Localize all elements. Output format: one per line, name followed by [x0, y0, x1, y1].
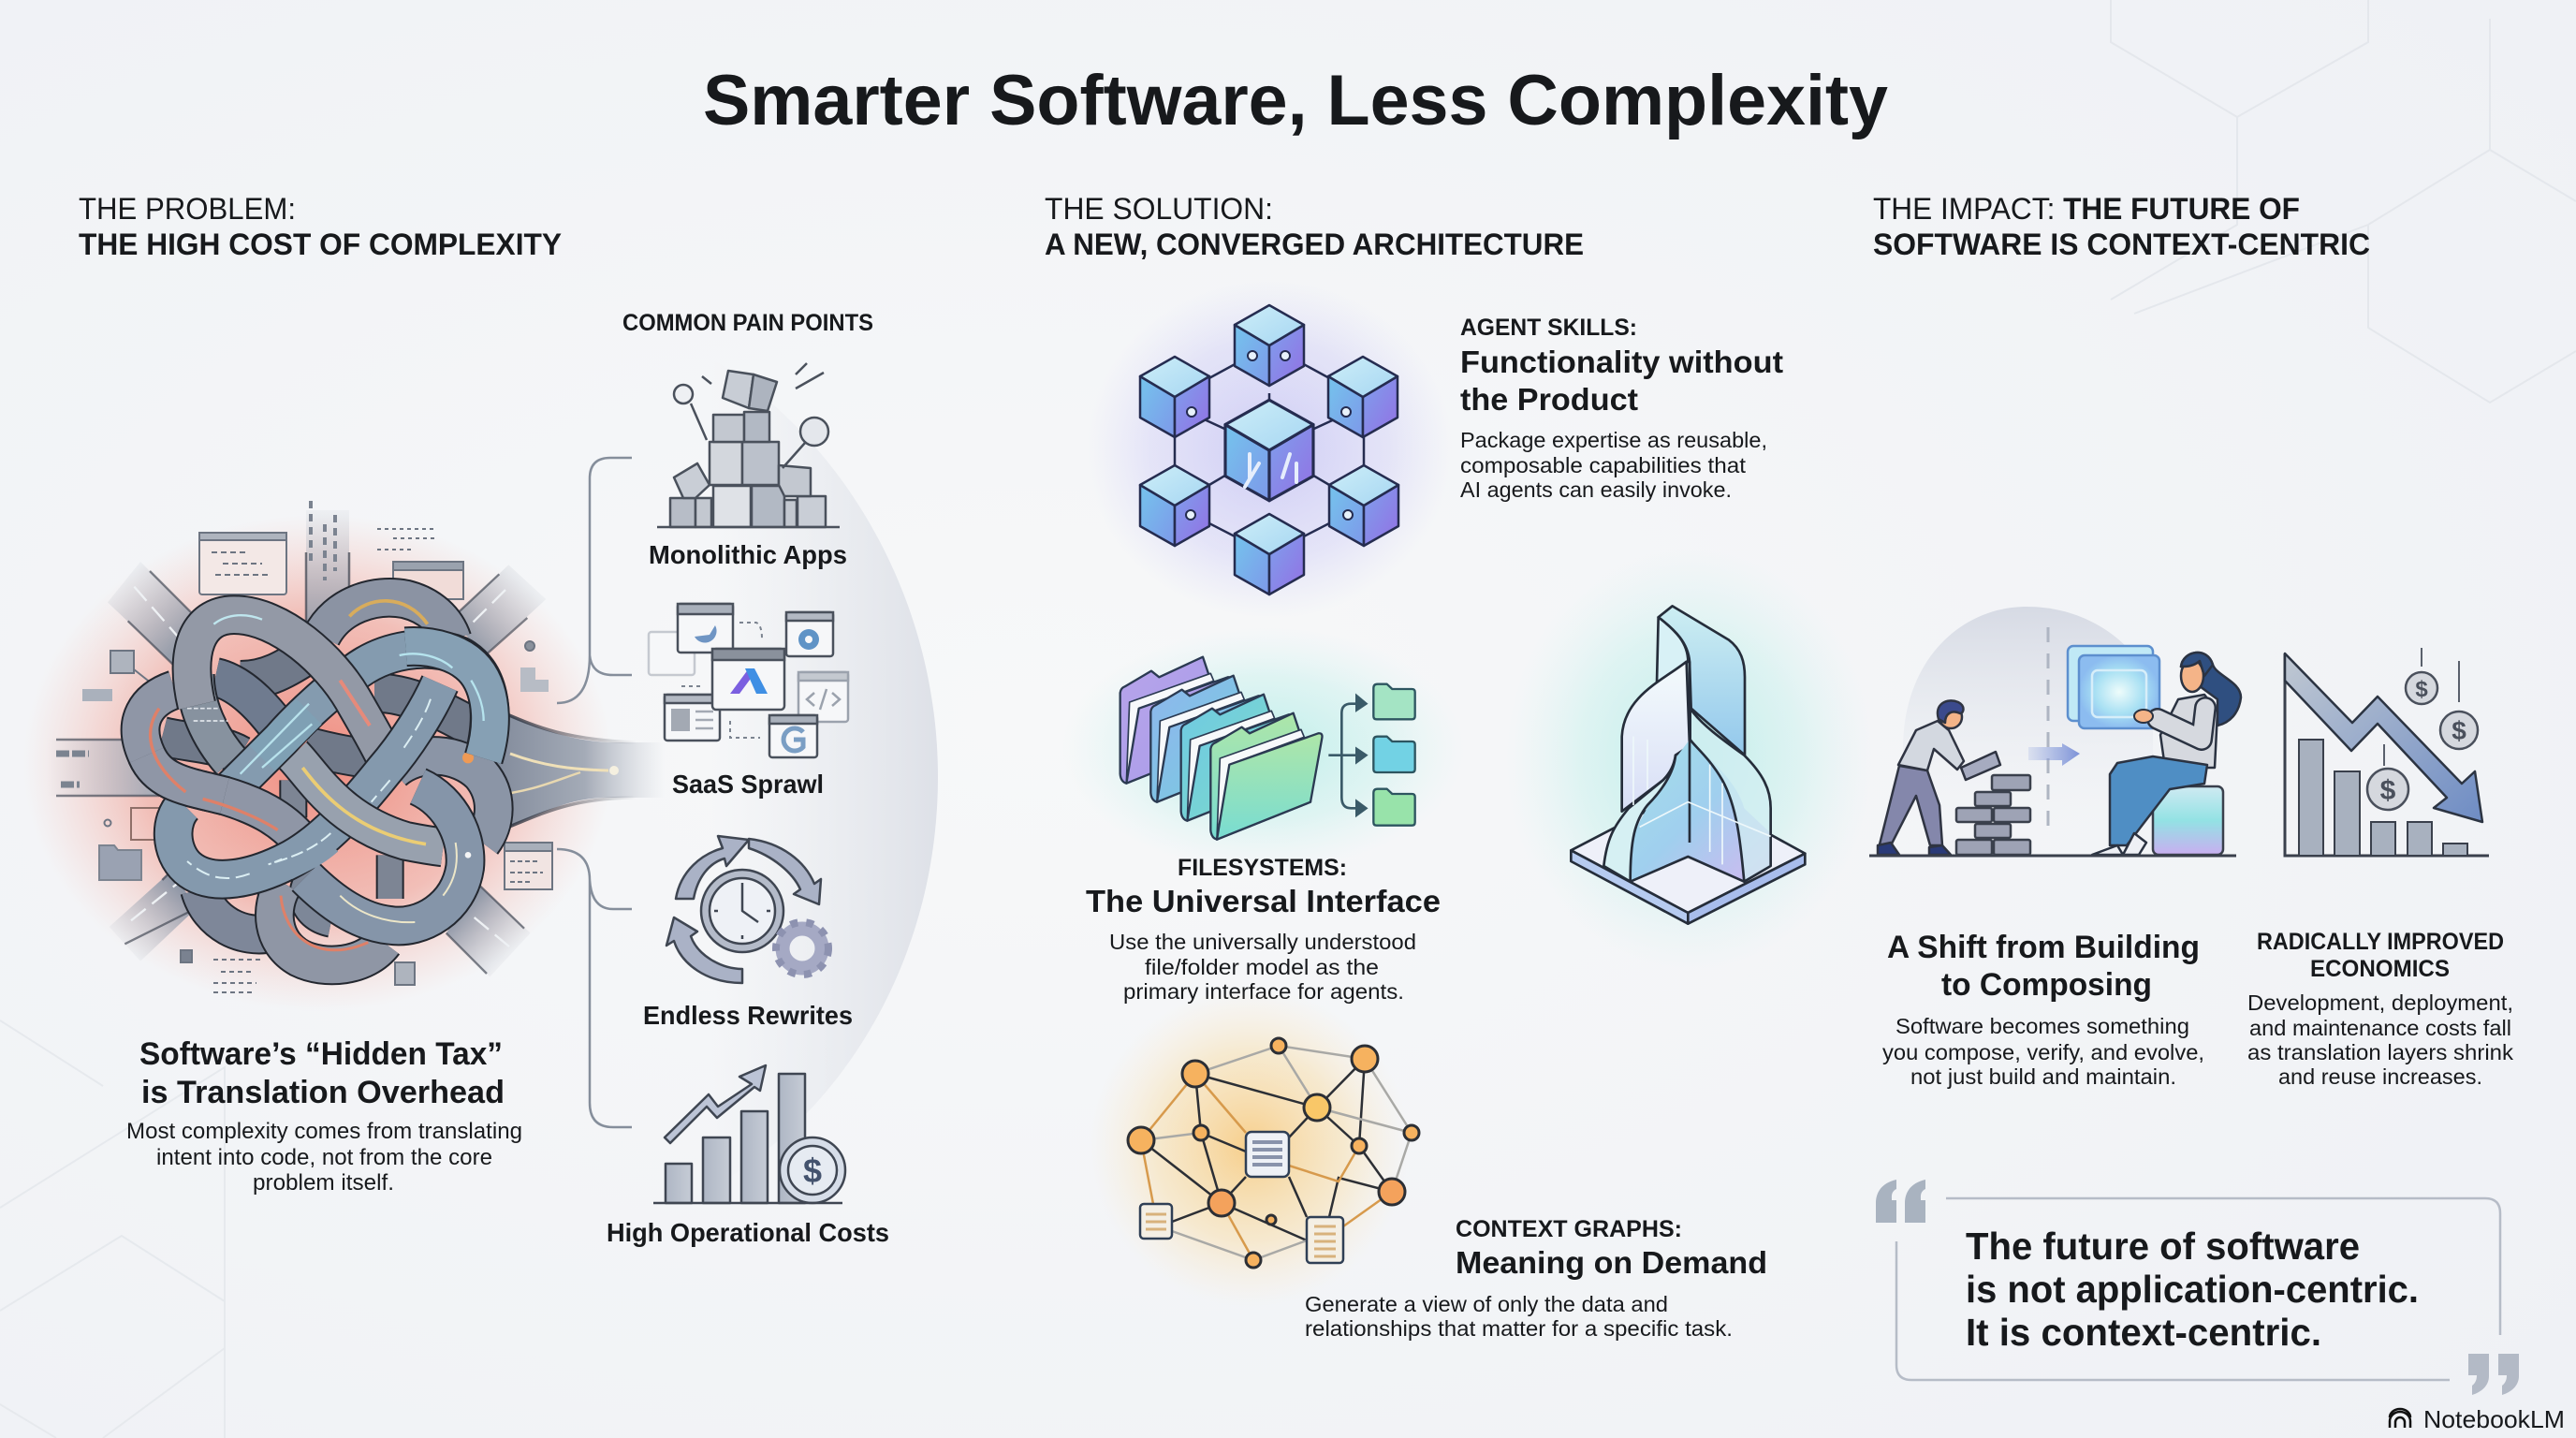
label: high operational costs: High Operational Costs [607, 1218, 889, 1247]
sub-element: falling arrow [2285, 653, 2482, 822]
sub-element: bracket connectors [557, 458, 632, 1127]
sub-element: man building [1878, 700, 2000, 855]
sub-element: coins: $ [2415, 677, 2428, 702]
sub-element: woman composing [2068, 646, 2241, 855]
section heading: the impact [1873, 192, 2370, 261]
panel: the problem [23, 192, 938, 1247]
section heading: the problem [79, 192, 562, 261]
text block: hidden tax: is Translation Overhead [141, 1075, 505, 1110]
section heading: the solution: A NEW, CONVERGED ARCHITECTURE [1045, 227, 1584, 261]
label: SaaS sprawl: SaaS Sprawl [672, 770, 824, 799]
section heading: the problem: THE HIGH COST OF COMPLEXITY [79, 227, 562, 261]
text block: filesystems: FILESYSTEMS: [1178, 855, 1347, 881]
icon: filesystem folders [1062, 627, 1465, 871]
text block: agent skills: AI agents can easily invoke. [1460, 477, 1732, 502]
icon: context graph [1090, 988, 1419, 1306]
text block: a shift from building: you compose, verify, and evolve, [1882, 1040, 2204, 1064]
illustration: falling cost chart [2285, 648, 2489, 856]
text block: context graphs: relationships that matter for a specific task. [1305, 1316, 1733, 1341]
section heading: the impact: THE IMPACT: THE FUTURE OF [1873, 192, 2300, 226]
text block: radically improved economics: ECONOMICS [2310, 956, 2450, 982]
icon: agent skills cube network [1087, 281, 1452, 618]
icon: SaaS sprawl windows [649, 604, 848, 757]
text block: agent skills: composable capabilities that [1460, 453, 1747, 477]
text block: quote text: It is context-centric. [1966, 1311, 2321, 1354]
text block: context graphs: Meaning on Demand [1456, 1245, 1767, 1280]
icon: converged glass tower [1506, 548, 1871, 969]
label: monolithic apps: Monolithic Apps [649, 540, 847, 569]
text block: hidden tax: Most complexity comes from translating [126, 1119, 522, 1144]
text block: a shift from building: to Composing [1941, 967, 2152, 1003]
sub-element: shift arrow [2028, 743, 2080, 766]
text block: agent skills: Functionality without [1460, 345, 1783, 379]
text block: hidden tax: intent into code, not from the core [156, 1145, 492, 1170]
section heading: the impact: SOFTWARE IS CONTEXT-CENTRIC [1873, 227, 2370, 261]
text block: context graphs: CONTEXT GRAPHS: [1456, 1216, 1682, 1242]
text block: radically improved economics: and maintenance costs fall [2249, 1016, 2511, 1040]
icon: closing quote [2468, 1354, 2519, 1395]
text block: radically improved economics: and reuse increases. [2278, 1064, 2482, 1089]
text block: filesystems: The Universal Interface [1086, 884, 1441, 918]
illustration: building to composing [1869, 607, 2241, 856]
label: endless rewrites: Endless Rewrites [643, 1001, 853, 1030]
icon: high operational costs chart: $ [803, 1152, 822, 1190]
text block: context graphs [1305, 1216, 1767, 1341]
sub-element: floating code windows and files [56, 529, 552, 992]
sub-element: coins: $ [2380, 775, 2396, 806]
icon: endless rewrites clock and gear [666, 836, 828, 983]
text block: quote text: The future of software [1966, 1225, 2360, 1268]
text block: radically improved economics: Development, deployment, [2247, 990, 2513, 1015]
section heading: the solution [1045, 192, 1584, 261]
text block: a shift from building: not just build and maintain. [1910, 1064, 2176, 1089]
title: Smarter Software, Less Complexity [703, 61, 1888, 140]
illustration: tangled knot of roads [23, 501, 665, 1011]
sub-element: radial roads [108, 562, 546, 976]
panel: the solution [1045, 192, 1871, 1341]
panel: the impact [1869, 192, 2519, 1395]
text block: agent skills: the Product [1460, 382, 1638, 417]
text block: filesystems: file/folder model as the [1145, 955, 1379, 979]
section heading: the problem: THE PROBLEM: [79, 192, 296, 226]
sub-element: bricks [1956, 775, 2030, 855]
text block: filesystems: primary interface for agents. [1123, 979, 1404, 1004]
text block: context graphs: Generate a view of only the data and [1305, 1292, 1668, 1316]
text block: agent skills: Package expertise as reusable, [1460, 428, 1767, 452]
text block: filesystems: Use the universally understood [1109, 930, 1416, 954]
text block: quote text: is not application-centric. [1966, 1268, 2419, 1311]
text block: filesystems [1086, 855, 1441, 1004]
sub-element: knot bands [140, 597, 499, 965]
icon: high operational costs chart [653, 1065, 845, 1203]
sub-element: seat cube [2153, 786, 2223, 855]
callout: quote [1876, 1180, 2519, 1395]
text block: agent skills [1460, 315, 1783, 502]
sub-element: coins: $ [2452, 716, 2466, 745]
curved backdrop behind pain points [524, 300, 938, 1236]
sub-element: pain points heading: COMMON PAIN POINTS [622, 310, 873, 336]
text block: radically improved economics: RADICALLY IMPROVED [2257, 929, 2504, 955]
text block: hidden tax: problem itself. [253, 1170, 394, 1196]
text block: hidden tax [126, 1036, 522, 1196]
sub-element: coins [2367, 672, 2478, 810]
text block: agent skills: AGENT SKILLS: [1460, 315, 1637, 341]
text block: a shift from building [1882, 930, 2204, 1089]
text block: a shift from building: A Shift from Building [1887, 930, 2200, 965]
text block: hidden tax: Software’s “Hidden Tax” [139, 1036, 503, 1072]
logo: NotebookLM: NotebookLM [2423, 1405, 2565, 1433]
text block: quote text [1966, 1225, 2419, 1354]
icon: opening quote [1876, 1180, 1925, 1223]
text block: a shift from building: Software becomes something [1895, 1014, 2189, 1038]
icon: monolithic apps box pile [657, 363, 840, 527]
section heading: the solution: THE SOLUTION: [1045, 192, 1273, 226]
text block: radically improved economics: as translation layers shrink [2247, 1040, 2514, 1064]
sub-element: glass cards [2068, 646, 2159, 728]
text block: radically improved economics [2247, 929, 2514, 1089]
